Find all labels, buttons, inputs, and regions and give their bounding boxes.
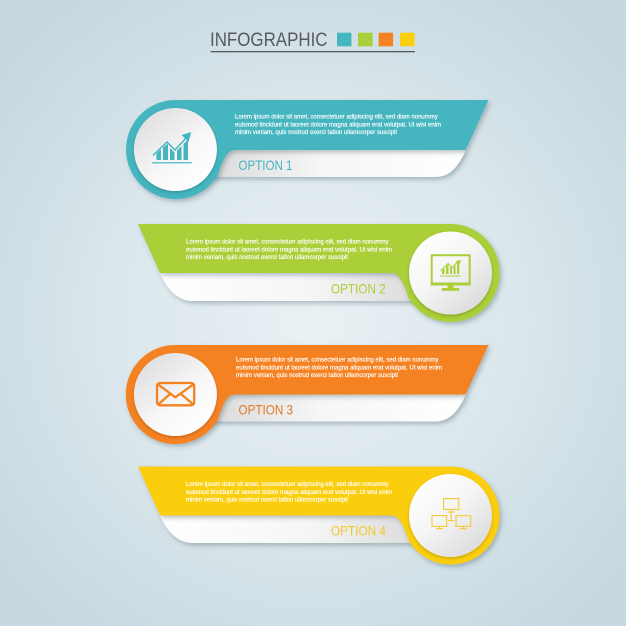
teal band with circle: [126, 100, 489, 199]
description text: euismod tincidunt ut laoreet dolore magna aliquam erat volutpat. Ut wisi enim: [186, 246, 392, 253]
title text: INFOGRAPHIC: [210, 29, 328, 51]
panel: option 3: [126, 345, 488, 444]
orange band with circle: [126, 345, 488, 444]
description text: minim veniam, quis nostrud exerci tation ullamcorper suscipit: [235, 129, 397, 136]
description text: [186, 239, 392, 261]
description text: [235, 114, 441, 136]
description text: [186, 481, 392, 504]
white disc: [409, 232, 492, 314]
title: [210, 29, 415, 52]
white label strip: [200, 394, 466, 422]
white disc: [409, 474, 492, 557]
title colour squares: [337, 33, 415, 46]
description text: euismod tincidunt ut laoreet dolore magna aliquam erat volutpat. Ut wisi enim: [236, 364, 442, 371]
white label strip: [160, 516, 430, 543]
icon: envelope: [157, 383, 194, 405]
description text: Lorem ipsum dolor sit amet, consectetuer adipiscing elit, sed diam nonummy: [186, 481, 389, 488]
panel: option 4: [138, 466, 500, 564]
white label strip: [200, 150, 466, 177]
option label: OPTION 4: [331, 523, 386, 539]
option label: OPTION 3: [238, 402, 293, 418]
description text: minim veniam, quis nostrud exerci tation ullamcorper suscipit: [186, 254, 348, 261]
description text: [236, 357, 442, 379]
description text: minim veniam, quis nostrud exerci tation ullamcorper suscipit: [236, 372, 398, 379]
description text: euismod tincidunt ut laoreet dolore magna aliquam erat volutpat. Ut wisi enim: [186, 489, 392, 496]
description text: Lorem ipsum dolor sit amet, consectetuer adipiscing elit, sed diam nonummy: [186, 239, 389, 246]
icon: networked computers: [432, 499, 471, 529]
option label: OPTION 1: [238, 157, 293, 173]
panel: option 1: [126, 100, 489, 199]
white disc: [134, 108, 217, 191]
description text: minim veniam, quis nostrud exerci tation ullamcorper suscipit: [186, 497, 348, 504]
icon: rising bar chart: [152, 132, 192, 163]
description text: euismod tincidunt ut laoreet dolore magna aliquam erat volutpat. Ut wisi enim: [235, 121, 441, 128]
description text: Lorem ipsum dolor sit amet, consectetuer adipiscing elit, sed diam nonummy: [236, 357, 439, 364]
panel: option 2: [138, 224, 500, 322]
yellow band with circle: [138, 466, 500, 564]
white disc: [134, 353, 217, 436]
white label strip: [160, 273, 430, 301]
description text: Lorem ipsum dolor sit amet, consectetuer adipiscing elit, sed diam nonummy: [235, 114, 438, 121]
icon: monitor with chart: [431, 254, 471, 291]
green band with circle: [138, 224, 500, 322]
option label: OPTION 2: [331, 280, 386, 296]
